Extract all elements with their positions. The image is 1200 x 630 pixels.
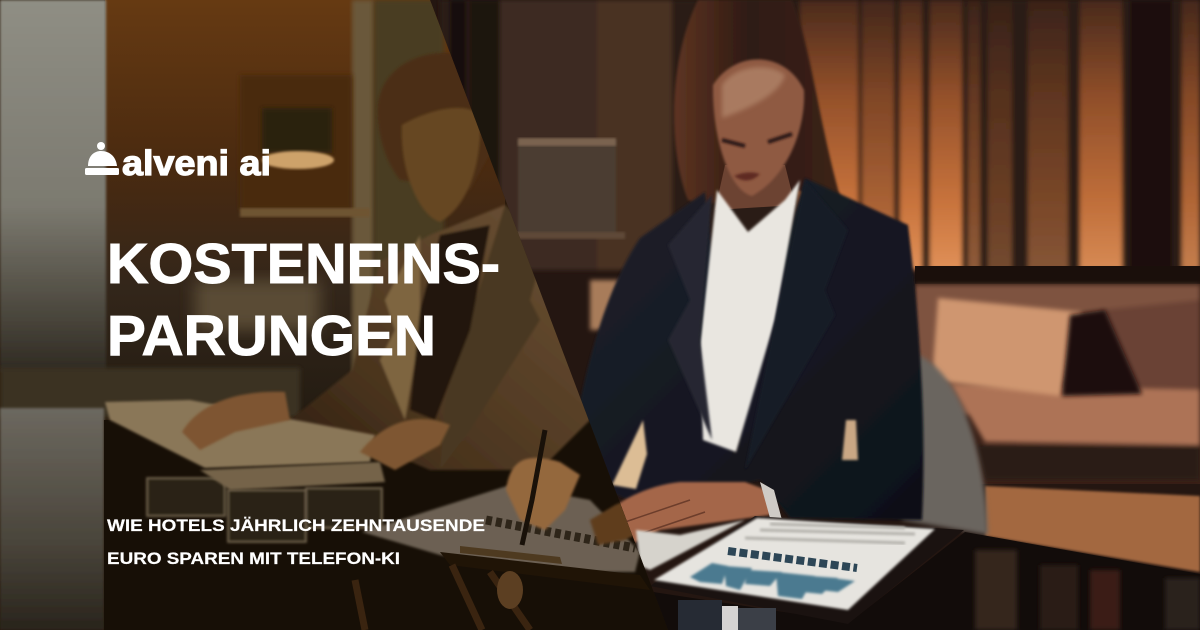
tinted chart dashes <box>486 520 635 548</box>
jacket <box>575 178 923 520</box>
tinted shelf and lamp <box>240 75 352 210</box>
logo wordmark: alveni ai <box>122 144 271 183</box>
subheadline <box>107 516 485 568</box>
hand on desk <box>592 482 772 545</box>
tinted face <box>402 108 480 222</box>
shirt <box>700 180 800 452</box>
headline: KOSTENEINS- <box>107 232 500 296</box>
sofa cushion dark <box>1062 310 1142 396</box>
report sheet <box>654 518 935 610</box>
figure: businesswoman <box>575 0 923 545</box>
lapel left <box>668 195 712 440</box>
floor <box>985 486 1200 572</box>
headline: PARUNGEN <box>107 304 436 368</box>
sofa cushion light <box>932 298 1082 396</box>
floor seen between arm and torso <box>612 420 647 489</box>
lapel right <box>745 180 848 470</box>
report small bars <box>728 551 857 568</box>
report big bars <box>690 563 855 599</box>
dark tinted left panel with mirrored scene <box>0 0 704 630</box>
tinted book <box>105 400 375 468</box>
white paper left <box>636 520 745 570</box>
desk clipboard and documents <box>636 516 964 630</box>
cuff <box>760 482 782 520</box>
clipboard <box>650 516 964 624</box>
headline <box>107 232 500 368</box>
desk reflection bottom right <box>640 532 1200 630</box>
tinted metal boxes <box>147 478 382 542</box>
neck <box>715 165 795 210</box>
tinted clipboard paper <box>362 485 640 572</box>
report text lines <box>745 524 915 543</box>
wood slat wall <box>440 0 1200 300</box>
tinted figure <box>290 53 594 470</box>
subheadline: EURO SPAREN MIT TELEFON-KI <box>107 549 400 568</box>
chair <box>902 355 988 535</box>
dark band under wall <box>915 266 1200 284</box>
tinted writing hand <box>506 458 580 530</box>
tinted hair <box>377 53 494 190</box>
tinted legs <box>355 565 530 630</box>
left light strip <box>0 0 106 372</box>
tinted upper hands <box>182 392 290 450</box>
subheadline: WIE HOTELS JÄHRLICH ZEHNTAUSENDE <box>107 516 485 535</box>
tinted pen <box>522 430 545 545</box>
hair <box>674 0 841 205</box>
wall box shelf <box>518 140 616 235</box>
tinted clipboard rail <box>440 552 650 590</box>
trousers and shirt tail under desk <box>722 606 738 630</box>
eyes and lips <box>722 134 792 181</box>
icon: reception bell <box>85 142 119 175</box>
fingers shading <box>625 500 705 534</box>
tinted wall <box>105 0 505 410</box>
tinted blazer <box>290 205 594 470</box>
sofa <box>915 285 1200 480</box>
logo: alveni ai <box>85 142 271 183</box>
face <box>713 59 804 196</box>
